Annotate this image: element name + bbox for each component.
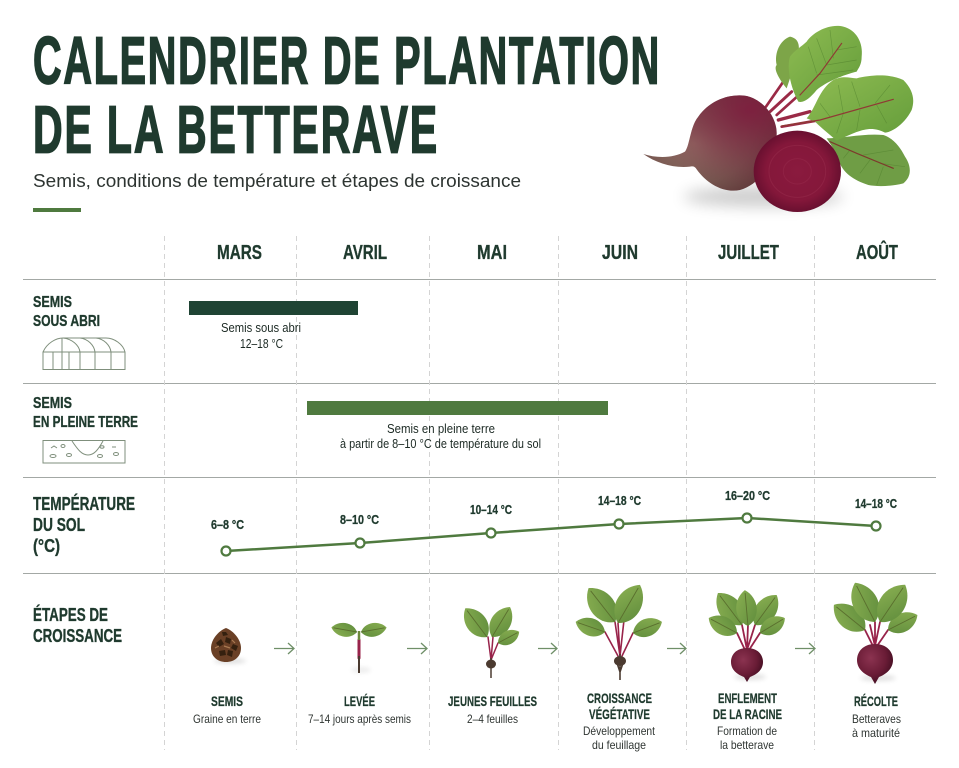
arrow — [795, 643, 815, 654]
stage caption — [308, 693, 411, 726]
stage caption: à maturité — [852, 726, 900, 740]
stage caption — [852, 693, 901, 740]
row label: SOUS ABRI — [33, 313, 100, 330]
icon: mature beet — [827, 577, 922, 684]
bar: semis sous abri — [189, 301, 358, 315]
row label: DU SOL — [33, 515, 85, 535]
row label: SEMIS — [33, 395, 72, 412]
row label — [33, 395, 138, 431]
icon: seed — [211, 628, 246, 664]
row label: étapes de croissance: CROISSANCE — [33, 626, 122, 646]
line chart: 8–10 °C — [340, 512, 380, 527]
icon: greenhouse — [43, 338, 125, 370]
arrow — [274, 643, 294, 654]
stage caption: RÉCOLTE — [854, 693, 898, 709]
arrow — [407, 643, 427, 654]
stage caption: Formation de — [717, 724, 777, 738]
month headers: JUIN — [602, 242, 638, 264]
stage caption: CROISSANCE — [587, 690, 652, 706]
row label: (°C) — [33, 536, 60, 556]
stage caption: 7–14 jours après semis — [308, 712, 411, 726]
row label — [33, 294, 100, 330]
arrow — [667, 643, 686, 654]
row: semis sous abri — [33, 294, 358, 370]
stage caption: du feuillage — [592, 738, 646, 752]
row label: étapes de croissance: ÉTAPES DE — [33, 604, 108, 625]
stage caption: JEUNES FEUILLES — [448, 693, 537, 709]
month headers: AOÛT — [856, 240, 898, 264]
row label: TEMPÉRATURE — [33, 493, 135, 514]
month headers — [217, 240, 898, 264]
stage caption: LEVÉE — [344, 693, 375, 709]
icon: young plant — [457, 602, 522, 678]
accent bar — [33, 208, 81, 212]
row label: EN PLEINE TERRE — [33, 414, 138, 431]
icon: seedling — [330, 621, 388, 673]
icon: soil furrow — [43, 440, 125, 463]
stage: enflement de la racine — [704, 586, 789, 752]
bar caption: 12–18 °C — [240, 337, 283, 351]
line chart: 14–18 °C — [598, 493, 641, 508]
stage caption: VÉGÉTATIVE — [589, 706, 650, 722]
arrow — [538, 643, 557, 654]
title: DE LA BETTERAVE — [33, 92, 439, 168]
stage caption: ENFLEMENT — [718, 690, 777, 706]
bar caption: à partir de 8–10 °C de température du sol — [340, 437, 541, 451]
stage: levée — [308, 621, 411, 726]
row: température du sol — [33, 488, 897, 556]
line chart: 10–14 °C — [470, 502, 512, 517]
bar caption — [221, 321, 301, 351]
title — [33, 24, 661, 168]
bar: semis en pleine terre — [307, 401, 608, 415]
stage caption — [713, 690, 782, 752]
stage: croissance végétative — [573, 579, 665, 752]
bar caption: Semis en pleine terre — [387, 422, 495, 436]
month headers: MAI — [477, 242, 507, 264]
line chart: 14–18 °C — [855, 496, 897, 511]
subtitle: Semis, conditions de température et étapes de croissance — [33, 171, 521, 191]
icon: swelling beet — [704, 586, 789, 682]
row label — [33, 493, 135, 556]
row label: SEMIS — [33, 294, 72, 311]
stage caption: SEMIS — [211, 693, 243, 709]
stage caption: 2–4 feuilles — [467, 712, 518, 726]
row label: étapes de croissance — [33, 604, 122, 646]
stage caption — [583, 690, 656, 752]
stage: récolte — [827, 577, 922, 740]
row: semis en pleine terre — [33, 395, 608, 463]
stage caption: Betteraves — [852, 712, 901, 726]
month headers: JUILLET — [718, 242, 779, 264]
stage: jeunes feuilles — [448, 602, 537, 726]
stage caption: Graine en terre — [193, 712, 261, 726]
month headers: AVRIL — [343, 242, 387, 264]
line chart — [211, 488, 897, 556]
line chart: 16–20 °C — [725, 488, 770, 503]
stage caption — [448, 693, 537, 726]
stage caption: Développement — [583, 724, 656, 738]
stage caption: la betterave — [720, 738, 774, 752]
stage: semis — [193, 628, 261, 726]
line chart: 6–8 °C — [211, 517, 245, 532]
icon: leafy plant — [573, 579, 665, 680]
illustration: beetroot with leaves — [643, 26, 913, 212]
bar caption — [340, 422, 541, 451]
stage caption — [193, 693, 261, 726]
bar caption: Semis sous abri — [221, 321, 301, 335]
month headers: MARS — [217, 242, 262, 264]
timeline grid — [23, 236, 936, 750]
stage caption: DE LA RACINE — [713, 706, 782, 722]
